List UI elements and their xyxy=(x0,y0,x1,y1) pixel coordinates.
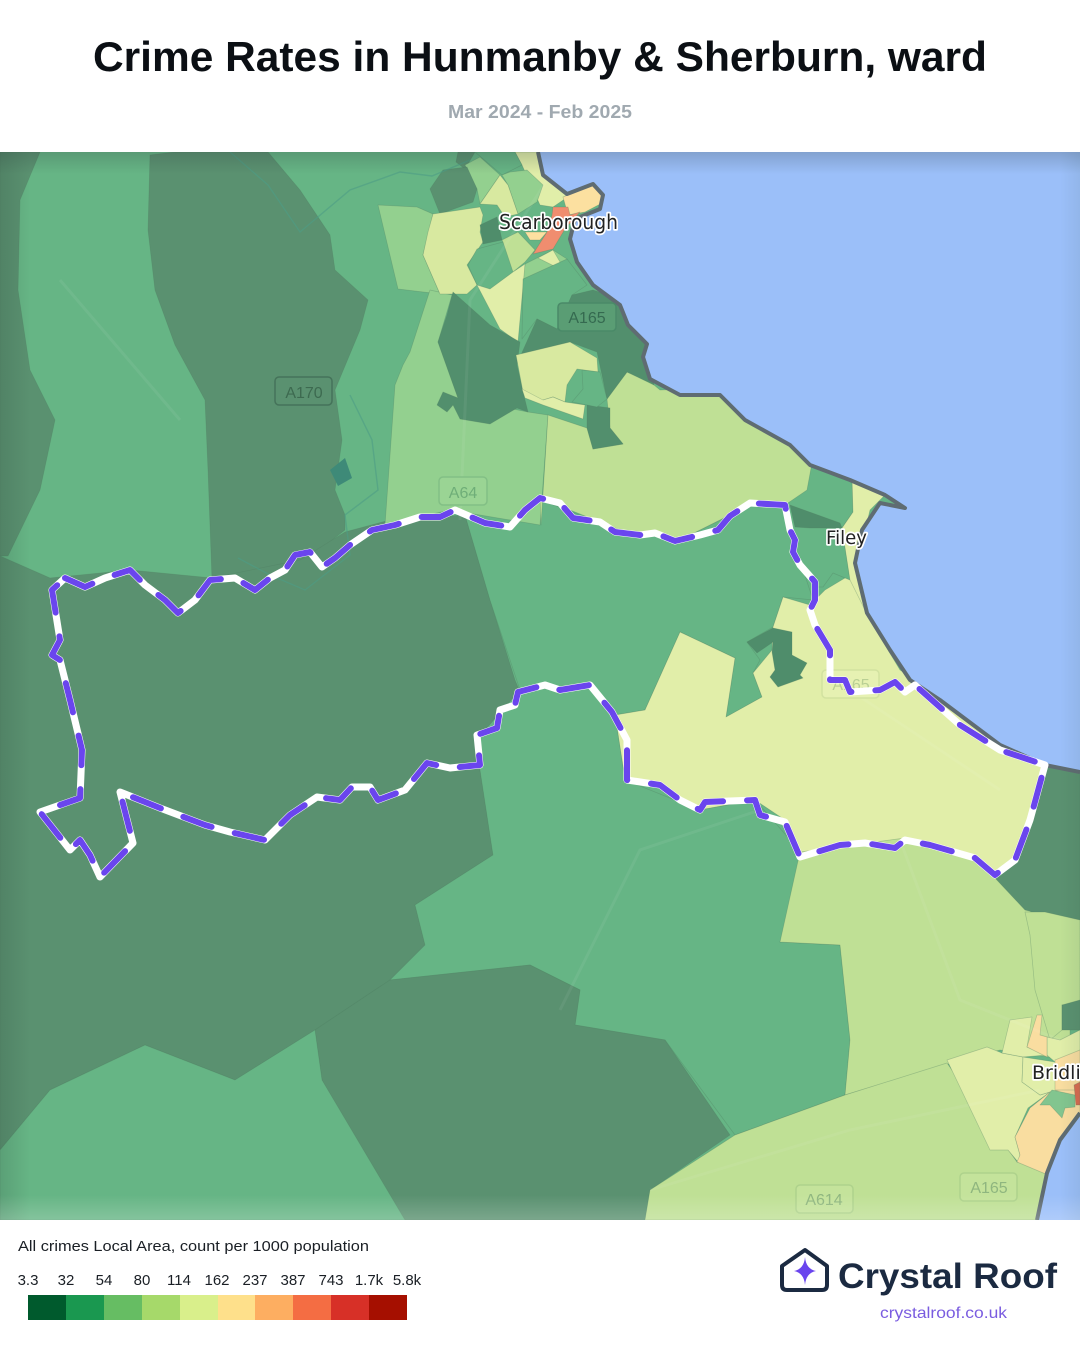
legend scale labels xyxy=(18,1272,422,1289)
region: lower mid green xyxy=(390,685,850,1135)
logo wordmark: Crystal Roof xyxy=(838,1257,1057,1296)
legend scale labels: 5.8k xyxy=(393,1272,422,1289)
region: peach Scarborough xyxy=(562,186,601,214)
coastline xyxy=(538,152,1080,1220)
subtitle: date range: Mar 2024 - Feb 2025 xyxy=(448,102,632,122)
region: light green west of Scarborough xyxy=(385,290,548,525)
legend scale labels: 387 xyxy=(280,1272,306,1289)
reservoir xyxy=(330,458,352,486)
region: south-east light green xyxy=(645,1063,1060,1220)
icon: house with star xyxy=(782,1250,827,1290)
region: pale Cayton xyxy=(516,342,598,402)
road label: A165 south: A165 xyxy=(970,1180,1008,1197)
ward boundary xyxy=(40,498,1045,877)
region: Bridlington peach xyxy=(1027,1015,1047,1057)
region: pale west Scarborough xyxy=(423,207,483,294)
sea south-east xyxy=(1037,1113,1080,1220)
road label: A165 north: A165 xyxy=(568,310,606,327)
place label: Filey: Filey xyxy=(826,527,867,549)
road label: A165 north xyxy=(558,303,616,331)
region: bottom-left mid green xyxy=(0,1084,405,1220)
region: Scarborough dark north-west xyxy=(430,167,477,214)
rivers xyxy=(230,152,470,590)
logo: Crystal Roof xyxy=(782,1250,1057,1322)
legend scale labels: 3.3 xyxy=(18,1272,38,1289)
base land xyxy=(0,152,1080,1220)
region: small dark xyxy=(480,217,502,244)
region: pale south of town xyxy=(477,264,525,342)
region: west ward dark xyxy=(0,515,520,1150)
region: light green north-west of Scarborough xyxy=(378,205,440,294)
region: pale ward east xyxy=(615,575,1045,878)
legend xyxy=(18,1238,422,1320)
region: east light green xyxy=(780,838,1070,1095)
region: bottom centre dark xyxy=(315,965,730,1220)
legend scale labels: 743 xyxy=(318,1272,344,1289)
region: mid blob xyxy=(468,242,503,285)
region: Bridlington green xyxy=(1040,1090,1075,1118)
road label: A170: A170 xyxy=(285,385,323,402)
place label: Scarborough: Scarborough xyxy=(499,210,618,234)
region: far-left dark xyxy=(0,152,55,556)
region: red town centre xyxy=(533,207,580,254)
region: small dark Bridlington xyxy=(1062,1000,1080,1030)
road label: A165 Filey: A165 xyxy=(832,677,870,694)
region: Scarborough north xyxy=(515,152,566,208)
region: mid green south-east Scarborough xyxy=(522,259,587,339)
area regions xyxy=(0,152,1080,1220)
region: far-east light green xyxy=(1025,912,1080,1040)
roads xyxy=(60,160,1060,1190)
region: Bridlington pale xyxy=(947,1047,1050,1162)
region: mid Cayton xyxy=(572,370,607,407)
region: Filey pale coast xyxy=(842,483,884,608)
legend colour ramp xyxy=(28,1295,407,1320)
road label: A165 Filey xyxy=(822,670,879,698)
legend scale labels: 162 xyxy=(204,1272,230,1289)
legend title: All crimes Local Area, count per 1000 population xyxy=(18,1238,369,1255)
legend scale labels: 237 xyxy=(242,1272,268,1289)
region: east coast dark xyxy=(995,765,1080,920)
region: south of Scarborough light green xyxy=(540,372,812,540)
region: centre Scarborough light xyxy=(502,232,535,272)
region: Filey dark band xyxy=(790,505,842,528)
region: dark south Scarborough xyxy=(520,290,654,399)
title: Crime Rates in Hunmanby & Sherburn, ward xyxy=(93,33,987,80)
region: dark patch Cayton xyxy=(587,405,623,449)
legend scale labels: 114 xyxy=(167,1272,191,1289)
legend scale labels: 80 xyxy=(134,1272,150,1289)
road label: A64: A64 xyxy=(449,485,477,502)
legend scale labels: 54 xyxy=(96,1272,112,1289)
region: dark blob xyxy=(437,292,528,424)
road label: A614 xyxy=(796,1185,853,1213)
logo url: crystalroof.co.uk xyxy=(880,1305,1008,1322)
choropleth map xyxy=(0,152,1080,1220)
vignette xyxy=(0,152,1080,1220)
region: dark patch near Hunmanby xyxy=(747,628,807,687)
road label: A170 xyxy=(275,377,332,405)
sea xyxy=(538,152,1080,772)
road label: A165 south xyxy=(960,1173,1017,1201)
region: centre-north mid green xyxy=(493,504,812,717)
legend scale labels: 1.7k xyxy=(355,1272,384,1289)
road label: A64 xyxy=(439,477,487,505)
region: forest dark xyxy=(148,152,368,580)
road label: A614: A614 xyxy=(805,1192,843,1209)
legend scale labels: 32 xyxy=(58,1272,74,1289)
region: Filey mid green xyxy=(785,463,853,587)
